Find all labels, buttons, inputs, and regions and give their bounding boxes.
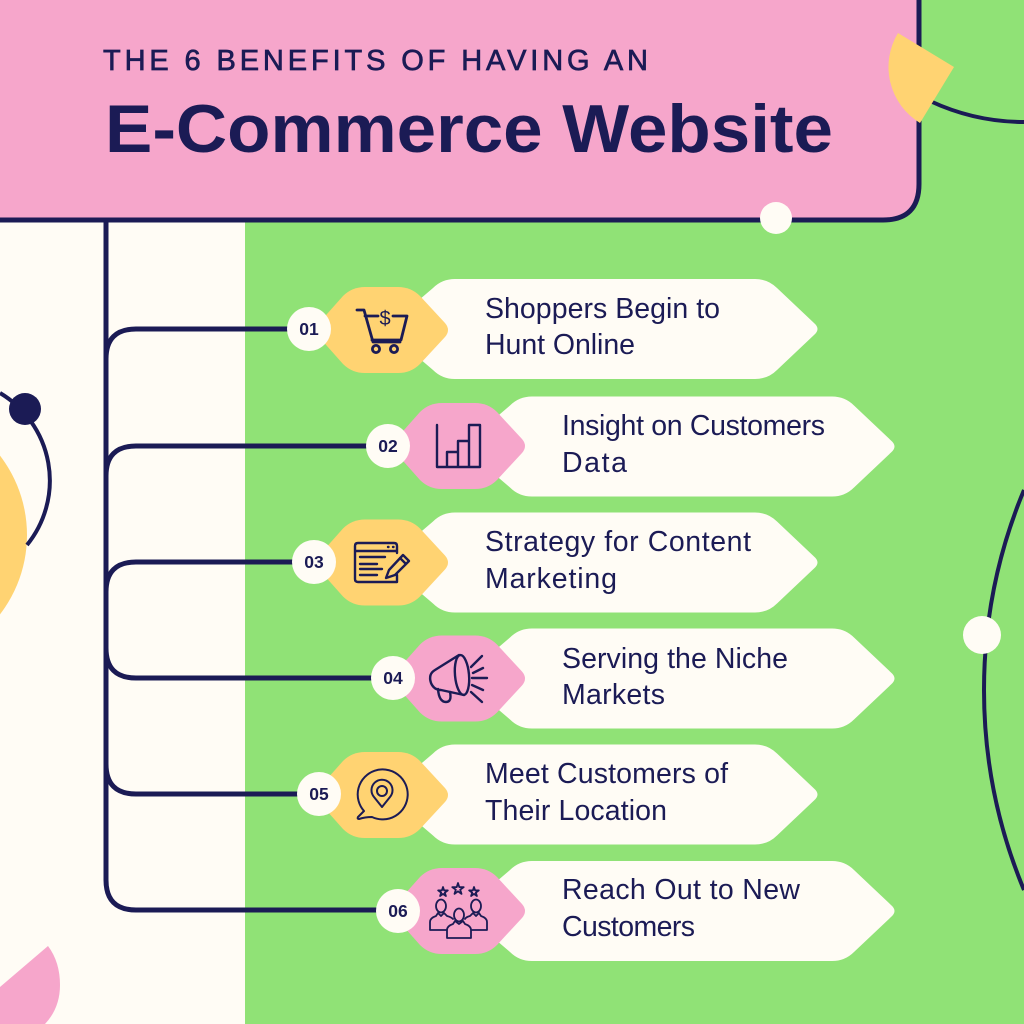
text 03: Strategy for Content xyxy=(485,526,751,558)
decoration: right white dot xyxy=(963,616,1001,654)
hexagon 06 xyxy=(394,868,525,954)
text 04: Serving the Niche xyxy=(562,643,788,675)
text 01: Hunt Online xyxy=(485,329,635,361)
text 03: Marketing xyxy=(485,563,617,595)
item 06 xyxy=(376,861,894,961)
item 03 xyxy=(292,512,818,612)
icon: people and stars xyxy=(430,883,487,938)
number 06 xyxy=(376,889,420,933)
number 03: 03 xyxy=(304,552,324,572)
number 02: 02 xyxy=(378,436,398,456)
text 01: Shoppers Begin to xyxy=(485,293,720,325)
number 04 xyxy=(371,656,415,700)
item 01 xyxy=(287,279,818,379)
decoration: header white dot xyxy=(760,202,792,234)
number 03 xyxy=(292,540,336,584)
icon: shopping cart: $ xyxy=(379,308,391,330)
text 04 xyxy=(562,643,788,711)
text 05: Their Location xyxy=(485,795,667,827)
hexagon 02 xyxy=(394,403,525,489)
icon: shopping cart xyxy=(357,308,407,353)
connector lines xyxy=(106,215,390,910)
decoration: right large arc xyxy=(984,490,1024,890)
hexagon 04 xyxy=(394,636,525,722)
text 04: Markets xyxy=(562,679,665,711)
text 06: Customers xyxy=(562,911,695,943)
tag 03 xyxy=(385,512,818,612)
number 05: 05 xyxy=(309,784,329,804)
text 05 xyxy=(485,758,728,827)
number 04: 04 xyxy=(383,668,403,688)
decoration: left yellow circle xyxy=(0,405,27,665)
item 05 xyxy=(297,744,818,844)
item 02 xyxy=(366,396,894,496)
number 02 xyxy=(366,424,410,468)
decoration: yellow sector xyxy=(888,33,954,123)
hexagon 03 xyxy=(316,520,448,606)
number 05 xyxy=(297,772,341,816)
decoration: top right arc xyxy=(930,101,1024,122)
tag 04 xyxy=(462,628,894,728)
heading: subtitle: THE 6 BENEFITS OF HAVING AN xyxy=(103,45,648,77)
decoration: left arc xyxy=(0,393,50,545)
icon: megaphone xyxy=(430,654,487,702)
icon: content window and pencil xyxy=(355,543,409,582)
panel: cream left column xyxy=(0,215,245,1024)
text 06: Reach Out to New xyxy=(562,874,800,906)
text 06 xyxy=(562,874,800,943)
text 01 xyxy=(485,293,720,361)
item 04 xyxy=(371,628,894,728)
text 05: Meet Customers of xyxy=(485,758,728,790)
tag 01 xyxy=(385,279,818,379)
text 02: Insight on Customers xyxy=(562,410,825,442)
text 02 xyxy=(562,410,825,479)
decoration: pink bottom-left sector xyxy=(0,946,60,1024)
panel: header banner xyxy=(0,0,919,220)
tag 05 xyxy=(385,744,818,844)
number 01 xyxy=(287,307,331,351)
hexagon 05 xyxy=(316,752,448,838)
number 06: 06 xyxy=(388,901,408,921)
icon: bar chart xyxy=(437,425,480,467)
hexagon 01 xyxy=(316,287,448,373)
text 03 xyxy=(485,526,751,595)
tag 02 xyxy=(462,396,894,496)
heading: title: E-Commerce Website xyxy=(105,91,833,167)
text 02: Data xyxy=(562,447,627,479)
tag 06 xyxy=(462,861,894,961)
decoration: left navy dot xyxy=(9,393,41,425)
icon: location speech bubble xyxy=(358,769,408,819)
number 01: 01 xyxy=(299,319,319,339)
